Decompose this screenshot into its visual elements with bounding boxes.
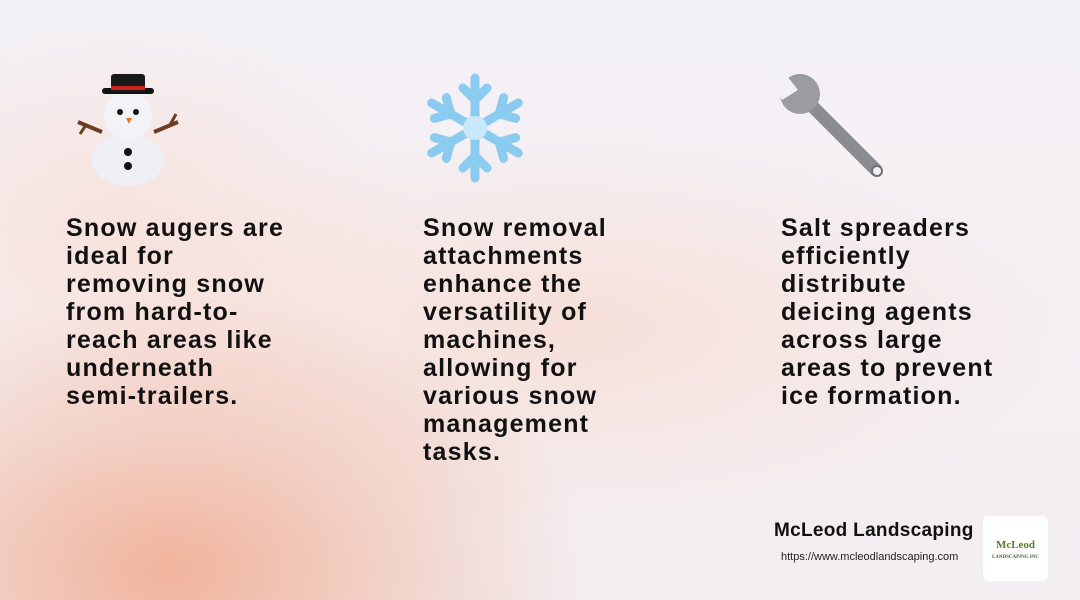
- footer: brand: [774, 516, 1048, 581]
- text block: salt spreaders: deicing agents: [781, 298, 973, 326]
- logo: [983, 516, 1048, 581]
- text block: attachments: Snow removal: [423, 214, 607, 242]
- text block: salt spreaders: Salt spreaders: [781, 214, 970, 242]
- text block: attachments: [423, 214, 607, 466]
- text block: salt spreaders: ice formation.: [781, 382, 962, 410]
- text block: salt spreaders: [781, 214, 993, 410]
- text block: snow augers: removing snow: [66, 270, 265, 298]
- text block: salt spreaders: distribute: [781, 270, 907, 298]
- icon: snowman: [77, 74, 179, 186]
- text block: attachments: tasks.: [423, 438, 501, 466]
- text block: salt spreaders: areas to prevent: [781, 354, 993, 382]
- text block: attachments: various snow: [423, 382, 597, 410]
- icon: snowflake: [427, 74, 523, 182]
- text block: attachments: enhance the: [423, 270, 582, 298]
- text block: snow augers: reach areas like: [66, 326, 273, 354]
- text block: attachments: allowing for: [423, 354, 578, 382]
- icon: wrench: [780, 74, 883, 177]
- text block: snow augers: semi-trailers.: [66, 382, 238, 410]
- text block: salt spreaders: across large: [781, 326, 943, 354]
- text block: salt spreaders: efficiently: [781, 242, 911, 270]
- logo: McLeod: [996, 539, 1035, 551]
- text block: attachments: management: [423, 410, 589, 438]
- logo: LANDSCAPING INC: [992, 555, 1039, 560]
- text block: snow augers: underneath: [66, 354, 214, 382]
- text block: attachments: versatility of: [423, 298, 587, 326]
- text block: snow augers: [66, 214, 284, 410]
- text block: attachments: machines,: [423, 326, 556, 354]
- footer: brand: McLeod Landscaping: [774, 520, 974, 541]
- text block: attachments: attachments: [423, 242, 583, 270]
- text block: snow augers: ideal for: [66, 242, 174, 270]
- text block: snow augers: from hard-to-: [66, 298, 239, 326]
- footer: brand: https://www.mcleodlandscaping.com: [781, 551, 958, 563]
- text block: snow augers: Snow augers are: [66, 214, 284, 242]
